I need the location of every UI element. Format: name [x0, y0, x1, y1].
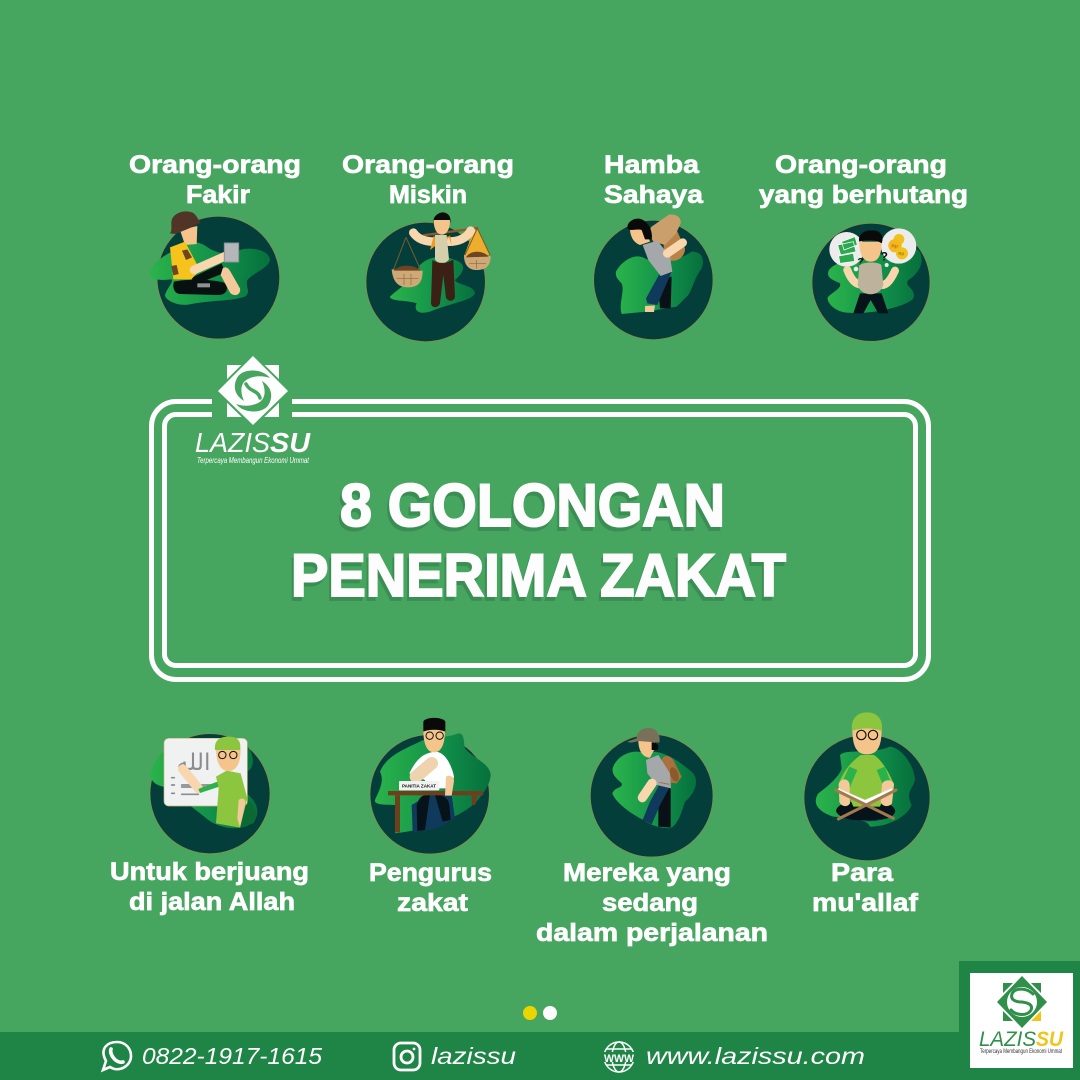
corner logo panel: SU — [1036, 1028, 1064, 1051]
label: Orang-orang Fakir — [129, 151, 301, 209]
logo: Lazissu in frame: Terpercaya Membangun Ekonomi Ummat — [197, 456, 310, 465]
icon: man in debt — [812, 223, 930, 341]
icon: convert reading Quran — [804, 712, 930, 861]
icon: man in debt: ? — [857, 257, 863, 268]
icon: seated poor man — [149, 211, 280, 339]
text: phone: 0822-1917-1615 — [142, 1043, 322, 1069]
title — [291, 472, 786, 609]
label: Hamba Sahaya: Sahaya — [604, 181, 704, 209]
icon: man in debt: Rp — [891, 244, 898, 250]
text: instagram handle: lazissu — [431, 1043, 516, 1069]
logo: Lazissu in frame: LAZIS — [195, 427, 270, 458]
icon: traveller with backpack — [590, 728, 713, 857]
corner logo panel: LAZIS — [979, 1028, 1036, 1051]
label: Mereka yang sedang dalam perjalanan: sedang — [602, 889, 698, 917]
label: Orang-orang yang berhutang — [759, 151, 968, 209]
label: Orang-orang Fakir: Fakir — [186, 181, 250, 209]
label: Mereka yang sedang dalam perjalanan — [536, 859, 768, 947]
title: 8 GOLONGAN — [340, 472, 725, 539]
title: PENERIMA ZAKAT — [291, 542, 786, 609]
label: Orang-orang Miskin — [342, 151, 514, 209]
pagination dots — [523, 1006, 557, 1020]
label: Para mu'allaf: Para — [831, 859, 894, 887]
logo: Lazissu in frame — [195, 354, 311, 465]
label: Mereka yang sedang dalam perjalanan: Mereka yang — [563, 859, 731, 887]
label: Orang-orang Miskin: Miskin — [389, 181, 467, 209]
label: Untuk berjuang di jalan Allah: Untuk berjuang — [110, 858, 309, 886]
icon: zakat committee: PANITIA ZAKAT — [402, 783, 436, 788]
label: Orang-orang yang berhutang: yang berhutang — [759, 181, 968, 209]
logo: Lazissu in frame: SU — [270, 427, 311, 458]
corner logo panel — [959, 961, 1080, 1080]
label: Para mu'allaf — [812, 859, 919, 917]
icon: teacher at board — [150, 734, 270, 854]
label: Mereka yang sedang dalam perjalanan: dalam perjalanan — [536, 919, 768, 947]
label: Pengurus zakat: Pengurus — [369, 859, 492, 887]
label: Para mu'allaf: mu'allaf — [812, 889, 919, 917]
icon: man in debt: Rp — [898, 251, 904, 256]
icon: porter with baskets — [366, 212, 491, 342]
central frame — [152, 402, 928, 680]
icon: instagram — [394, 1043, 420, 1070]
label: Orang-orang Miskin: Orang-orang — [342, 151, 514, 179]
icon: whatsapp — [103, 1042, 131, 1070]
icon: zakat committee — [370, 718, 491, 854]
footer bar — [0, 1032, 1080, 1080]
label: Orang-orang Fakir: Orang-orang — [129, 151, 301, 179]
label: Orang-orang yang berhutang: Orang-orang — [775, 151, 947, 179]
label: Untuk berjuang di jalan Allah — [110, 858, 309, 916]
label: Untuk berjuang di jalan Allah: di jalan Allah — [129, 888, 295, 916]
text: website: www.lazissu.com — [646, 1043, 865, 1069]
label: Pengurus zakat — [369, 859, 492, 917]
icon: globe: WWW — [604, 1053, 635, 1065]
icon: globe — [603, 1042, 635, 1072]
label: Hamba Sahaya: Hamba — [604, 151, 700, 179]
label: Hamba Sahaya — [604, 151, 704, 209]
icon: enslaved man carrying sack — [594, 215, 713, 340]
label: Pengurus zakat: zakat — [397, 889, 469, 917]
icon: teacher at board: الله — [177, 748, 210, 776]
icon: man in debt: ? — [881, 250, 888, 264]
